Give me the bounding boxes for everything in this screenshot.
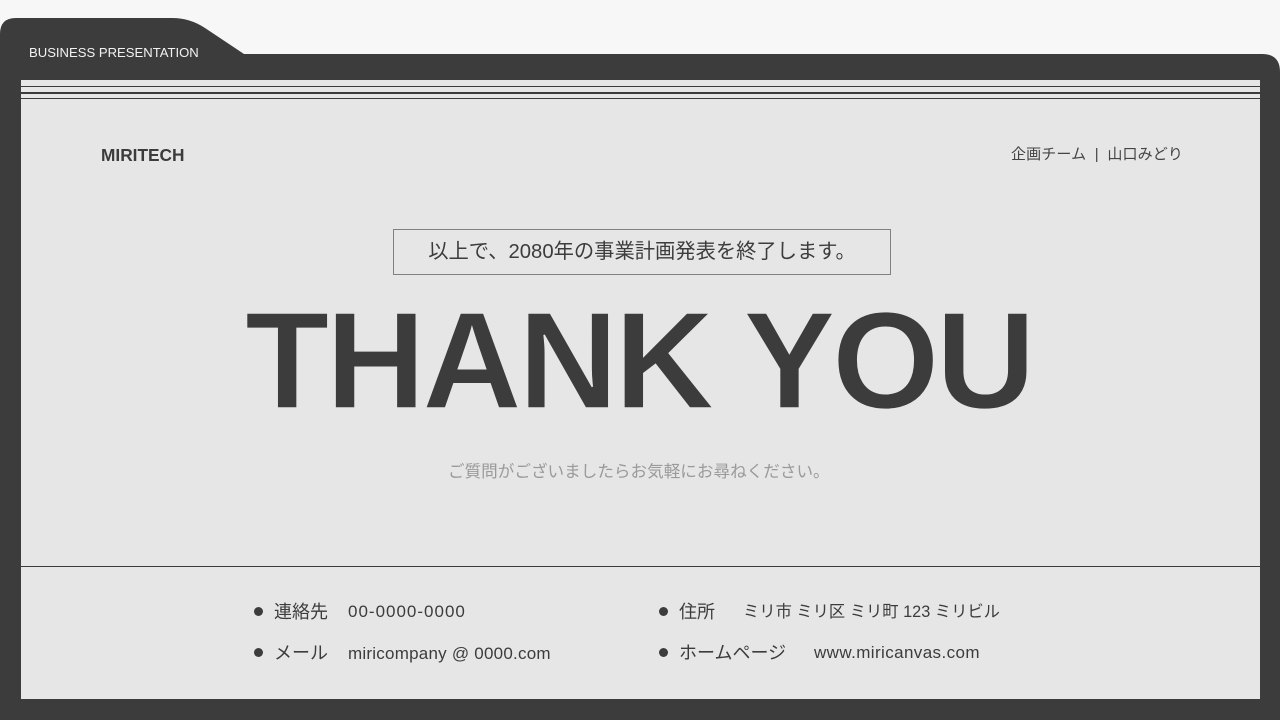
contact: website — [659, 643, 980, 663]
contact: email: miricompany @ 0000.com — [348, 644, 551, 663]
contact: website: www.miricanvas.com — [814, 643, 980, 662]
main heading: THANK YOU — [245, 284, 1032, 438]
contact: phone: 00-0000-0000 — [348, 602, 466, 621]
tab label: BUSINESS PRESENTATION — [29, 45, 199, 60]
contact: address: 住所 — [679, 602, 715, 622]
brand name: MIRITECH — [101, 145, 185, 165]
subtitle box — [393, 229, 891, 275]
top rule 1 — [21, 86, 1260, 87]
contact: address — [659, 602, 1000, 622]
contact: website: ホームページ — [679, 643, 786, 663]
team and presenter: 企画チーム | 山口みどり — [1011, 146, 1183, 163]
contact: phone — [254, 602, 466, 622]
contact info — [254, 602, 1000, 663]
contact: email — [254, 643, 551, 663]
contact: address: ミリ市 ミリ区 ミリ町 123 ミリビル — [743, 603, 1000, 621]
subtitle box: 以上で、2080年の事業計画発表を終了します。 — [428, 241, 856, 263]
footer divider — [21, 566, 1260, 567]
top rule 2 — [21, 92, 1260, 94]
top rule 3 — [21, 98, 1260, 99]
question note: ご質問がございましたらお気軽にお尋ねください。 — [448, 462, 830, 481]
contact: email: メール — [274, 643, 328, 663]
contact: phone: 連絡先 — [274, 602, 328, 622]
